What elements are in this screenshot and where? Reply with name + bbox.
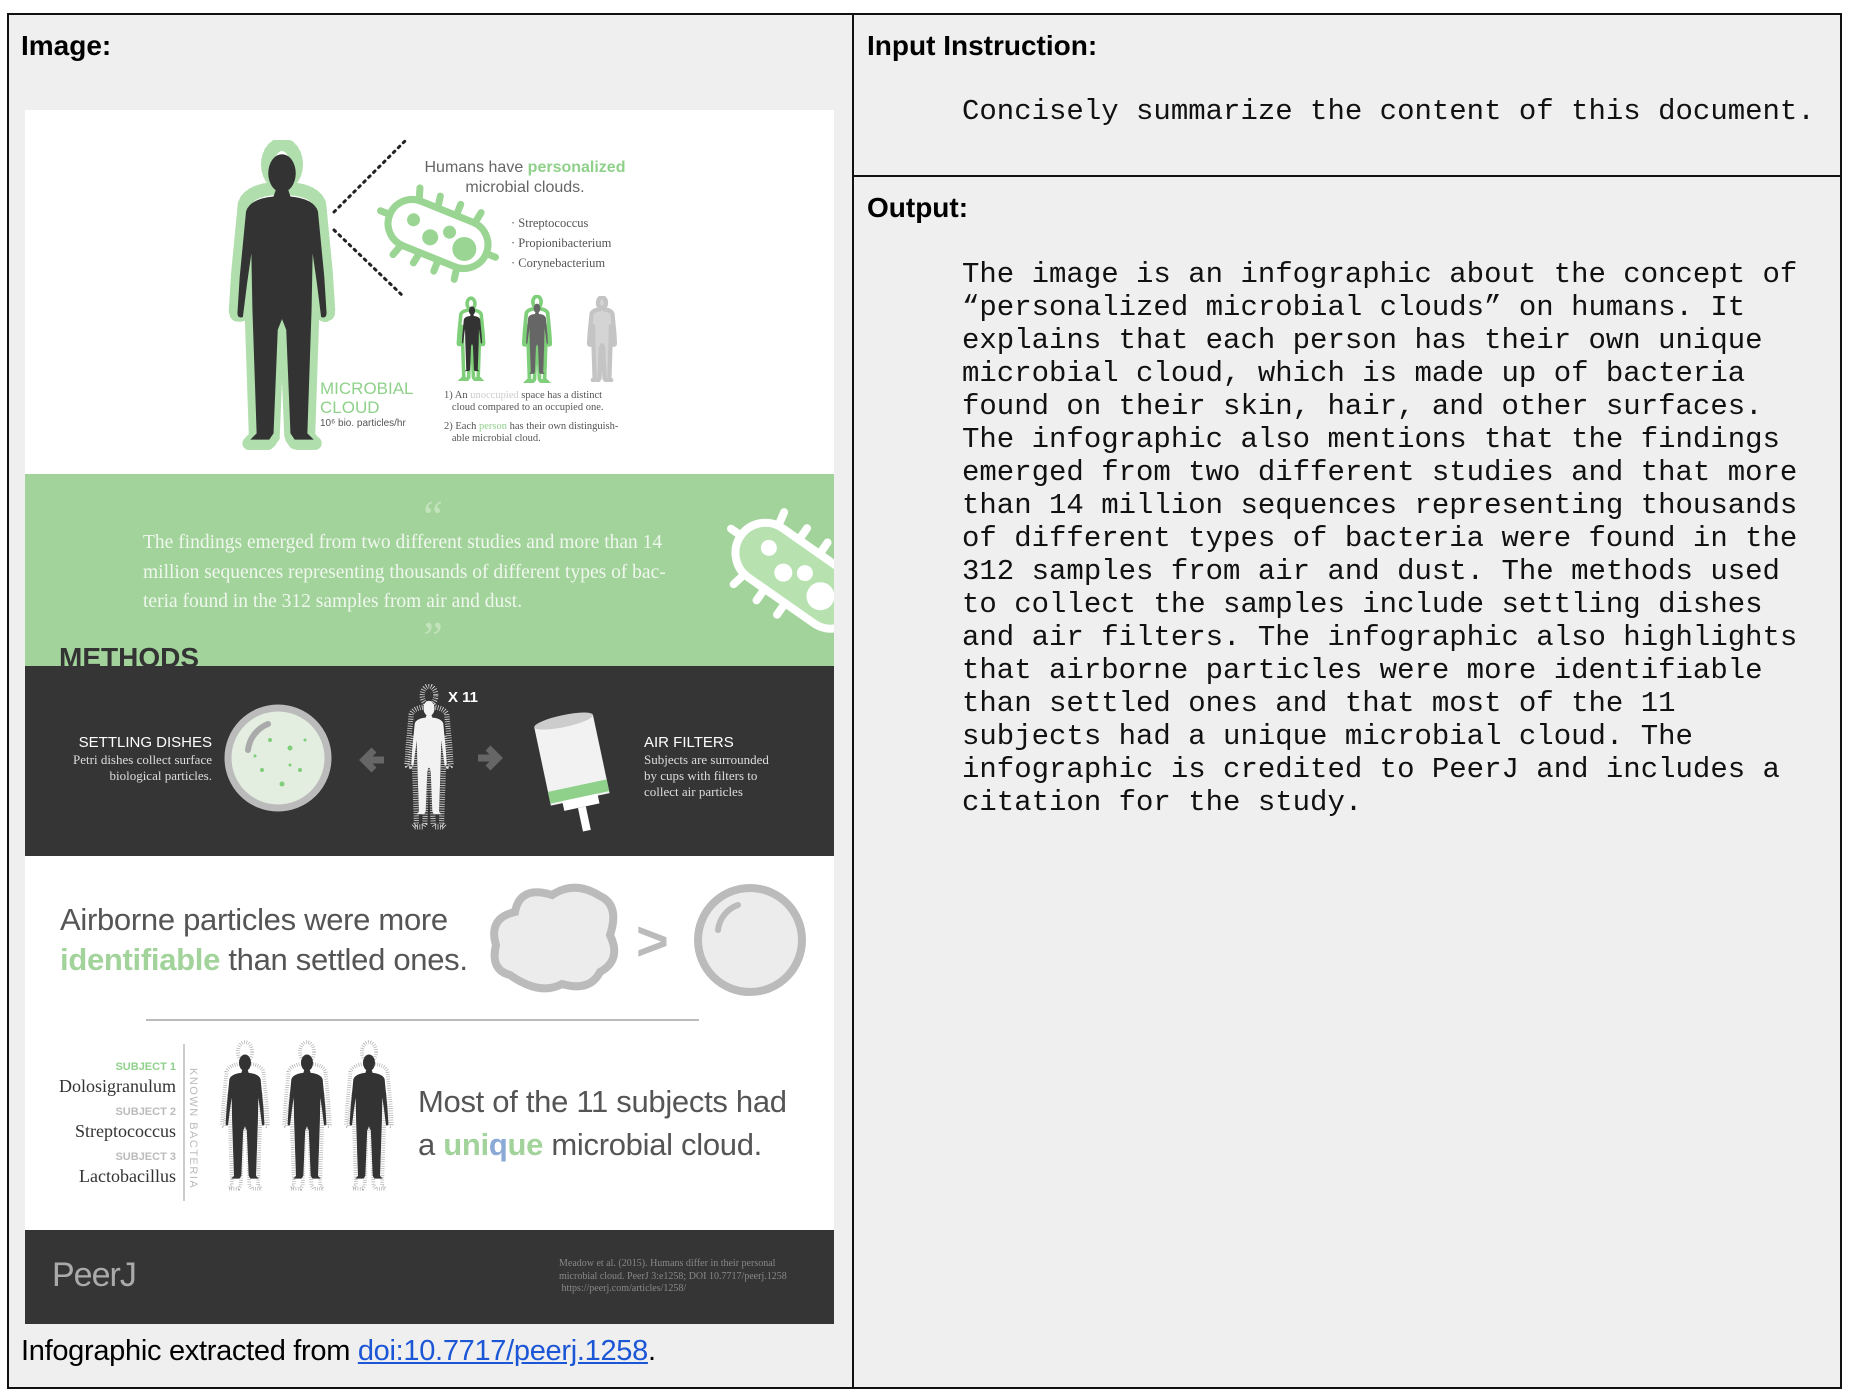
icon: circle <box>698 888 802 992</box>
section: intro white <box>25 110 834 474</box>
heading: Output: Output: <box>867 192 968 223</box>
icon: air filter cup <box>533 709 616 837</box>
heading: humans have personalized microbial clouds: Humans have personalized <box>424 159 625 176</box>
label: microbial cloud: 10⁶ bio. particles/hr <box>320 418 406 429</box>
quote <box>143 492 666 662</box>
icon: petri dish <box>228 708 328 808</box>
graphics layer <box>146 140 834 1201</box>
notes: cloud compared to an occupied one. 2) Each person has their own distinguish- <box>444 402 618 432</box>
list: subjects: Streptococcus <box>75 1121 176 1141</box>
icon: subject figure x11 <box>407 686 478 827</box>
list: subjects: Dolosigranulum <box>59 1076 176 1096</box>
heading: Input Instruction: Input Instruction: <box>867 30 1097 61</box>
list: bacteria: · Streptococcus <box>511 216 588 230</box>
text: settling dishes <box>73 734 212 783</box>
list: subjects: SUBJECT 1 <box>115 1061 176 1073</box>
quote: teria found in the 312 samples from air and dust. <box>143 591 522 612</box>
citation <box>559 1258 787 1294</box>
citation: Meadow et al. (2015). Humans differ in their personal <box>559 1258 775 1269</box>
output text: The image is an infographic about the concept of “personalized microbial clouds” on humans. It explains that each person has their own unique microbial cloud, which is made up of bacteria found on their skin, hair, and other surfaces. The infographic also mentions that the findings emerged from two different studies and that more than 14 million sequences representing thousands of different types of bacteria were found in the 312 samples from air and dust. The methods used to collect the samples include settling dishes and air filters. The infographic also highlights that airborne particles were more identifiable than settled ones and that most of the 11 subjects had a unique microbial cloud. The infographic is credited to PeerJ and includes a citation for the study. <box>962 258 1797 819</box>
label: microbial cloud: CLOUD <box>320 398 380 417</box>
list: subjects: Lactobacillus <box>79 1166 176 1186</box>
text: settling dishes: biological particles. <box>109 768 212 783</box>
panel: input instruction <box>852 13 1842 177</box>
heading: humans have personalized microbial clouds: microbial clouds. <box>465 179 585 196</box>
logo: PeerJ: PeerJ <box>52 1256 136 1294</box>
list: subjects <box>59 1061 176 1186</box>
icon: right white bacterium <box>727 508 834 633</box>
text: air filters: by cups with filters to <box>644 768 757 783</box>
quote: ” <box>423 612 443 662</box>
caption: Infographic extracted from doi:10.7717/peerj.1258. <box>21 1335 656 1367</box>
panel: image frame <box>7 13 854 1389</box>
instruction text: Concisely summarize the content of this document. <box>962 95 1815 128</box>
text: unique microbial cloud <box>418 1084 787 1162</box>
icon: big human with microbial cloud <box>235 144 329 443</box>
text: air filters: Subjects are surrounded <box>644 752 769 767</box>
label: microbial cloud <box>320 379 414 429</box>
list: bacteria <box>511 216 612 270</box>
text: airborne particles <box>60 902 468 977</box>
list: subjects: SUBJECT 3 <box>115 1151 176 1163</box>
section: methods dark band <box>25 666 834 856</box>
icon: subject figure x11: X 11 <box>448 689 478 706</box>
panel: output <box>852 175 1842 1389</box>
icon: green bacterium <box>377 184 499 283</box>
quote: The findings emerged from two different studies and more than 14 <box>143 532 662 553</box>
text: settling dishes: SETTLING DISHES <box>79 734 212 751</box>
infographic <box>25 110 834 1324</box>
text: unique microbial cloud: Most of the 11 subjects had <box>418 1084 787 1119</box>
list: bacteria: · Propionibacterium <box>511 236 611 250</box>
text: airborne particles: Airborne particles were more <box>60 902 448 937</box>
quote: million sequences representing thousands of different types of bac- <box>143 562 666 582</box>
vertical label: known bacteria: KNOWN BACTERIA <box>187 1068 199 1189</box>
text: airborne particles: identifiable than settled ones. <box>60 942 468 977</box>
text: air filters <box>644 734 769 799</box>
arrow: right <box>478 748 498 768</box>
text: settling dishes: Petri dishes collect surface <box>73 752 212 767</box>
text: air filters: AIR FILTERS <box>644 734 734 751</box>
text: air filters: collect air particles <box>644 784 743 799</box>
section: green quote band <box>25 474 834 666</box>
notes: 1) An unoccupied space has a distinct <box>444 390 602 401</box>
label: microbial cloud: MICROBIAL <box>320 379 414 398</box>
text: unique microbial cloud: a unique microbial cloud. <box>418 1127 762 1162</box>
icon: three subject figures <box>222 1042 392 1189</box>
heading: Image: Image: <box>21 30 111 61</box>
icon: three small figures <box>458 296 615 381</box>
footer <box>25 1230 834 1324</box>
dotted pointer lines <box>334 139 407 297</box>
list: subjects: SUBJECT 2 <box>115 1106 176 1118</box>
citation: https://peerj.com/articles/1258/ <box>562 1283 686 1294</box>
citation: microbial cloud. PeerJ 3:e1258; DOI 10.7717/peerj.1258 <box>559 1270 787 1282</box>
notes <box>444 390 618 444</box>
greater-than sign: > <box>636 909 669 972</box>
icon: cloud <box>494 888 614 988</box>
heading: humans have personalized microbial clouds <box>424 159 625 196</box>
quote: “ <box>423 492 443 541</box>
arrow: left <box>364 750 384 770</box>
list: bacteria: · Corynebacterium <box>511 256 605 270</box>
notes: able microbial cloud. <box>452 433 541 444</box>
